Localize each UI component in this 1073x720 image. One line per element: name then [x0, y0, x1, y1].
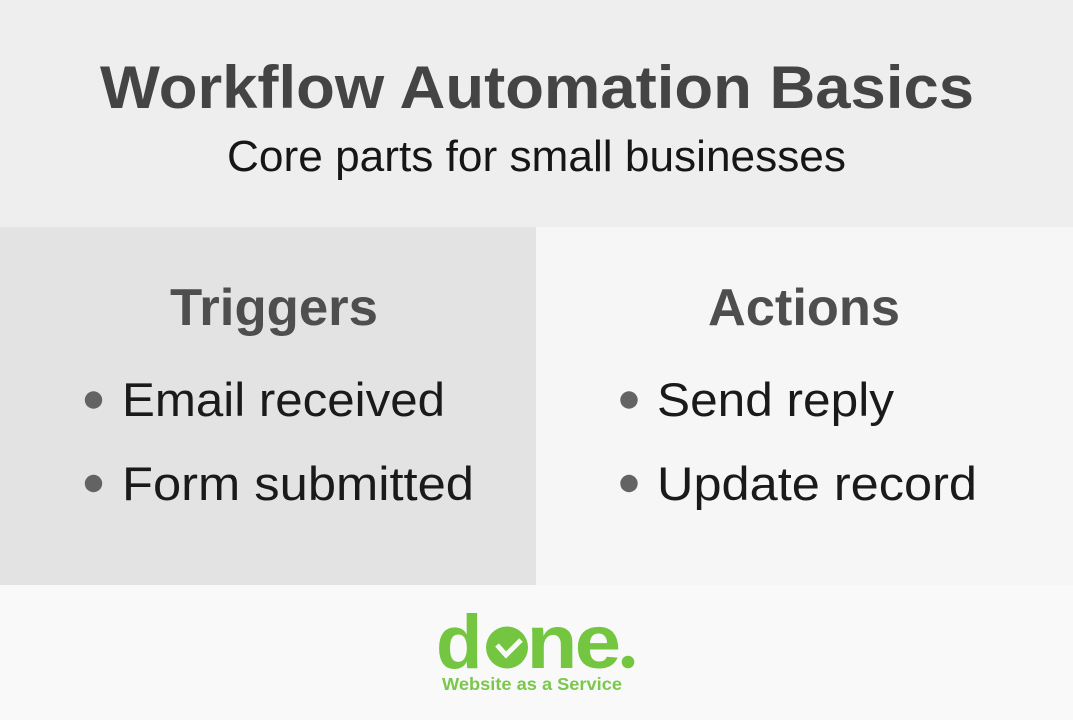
list item: send reply: Send reply [657, 373, 895, 426]
heading: actions: Actions [708, 279, 900, 337]
subtitle: Core parts for small businesses [227, 132, 846, 181]
list item: form submitted: Form submitted [122, 457, 474, 510]
heading: triggers: Triggers [170, 279, 378, 337]
title: Workflow Automation Basics [100, 54, 974, 121]
list item: update record: Update record [657, 457, 977, 510]
list item: email received: Email received [122, 373, 445, 426]
panel: header [0, 0, 1073, 227]
logo letter d: d [436, 600, 482, 685]
panel: footer background [0, 585, 1073, 720]
logo letter e: e [575, 600, 621, 685]
panel: actions [536, 227, 1073, 585]
logo: done [436, 600, 634, 694]
logo dot [622, 656, 634, 668]
logo tagline: Website as a Service [442, 674, 622, 694]
panel: triggers [0, 227, 536, 585]
logo letter n: n [526, 600, 578, 685]
icon: check circle [486, 626, 528, 668]
